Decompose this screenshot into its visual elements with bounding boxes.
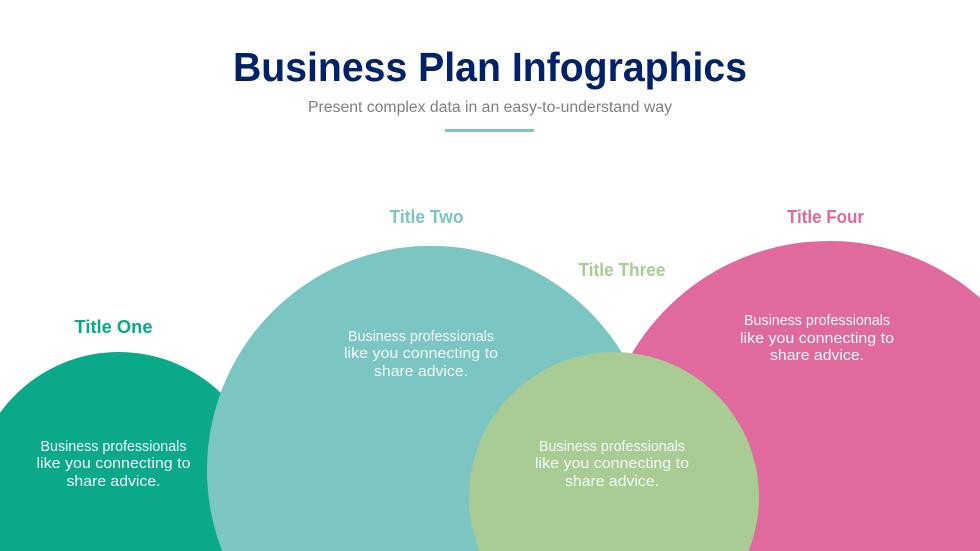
text block: title one: Business professionals — [40, 438, 186, 455]
text block: title four: share advice. — [770, 347, 864, 364]
text block: title four — [740, 312, 894, 364]
accent underline — [445, 129, 534, 132]
text block: title one — [36, 438, 190, 490]
text block: title four: like you connecting to — [740, 330, 894, 347]
circle: title three — [469, 352, 759, 551]
heading: title three: Title Three — [578, 260, 666, 280]
text block: title one: share advice. — [66, 473, 160, 490]
text block: title two — [344, 328, 498, 380]
text block: title three: Business professionals — [539, 438, 685, 455]
circle: title four — [600, 241, 980, 551]
subtitle: Present complex data in an easy-to-understand way — [308, 99, 672, 116]
text block: title two: share advice. — [374, 363, 468, 380]
text block: title four: Business professionals — [744, 312, 890, 329]
text block: title three: share advice. — [565, 473, 659, 490]
text block: title one: like you connecting to — [36, 455, 190, 472]
circle: title two — [207, 246, 655, 551]
heading: title four: Title Four — [787, 207, 864, 227]
text block: title two: like you connecting to — [344, 345, 498, 362]
text block: title two: Business professionals — [348, 328, 494, 345]
heading: title two: Title Two — [390, 207, 464, 227]
circle: title one — [0, 352, 266, 551]
text block: title three — [535, 438, 689, 490]
text block: title three: like you connecting to — [535, 455, 689, 472]
heading: title one: Title One — [74, 317, 152, 337]
title: Business Plan Infographics — [233, 44, 747, 90]
